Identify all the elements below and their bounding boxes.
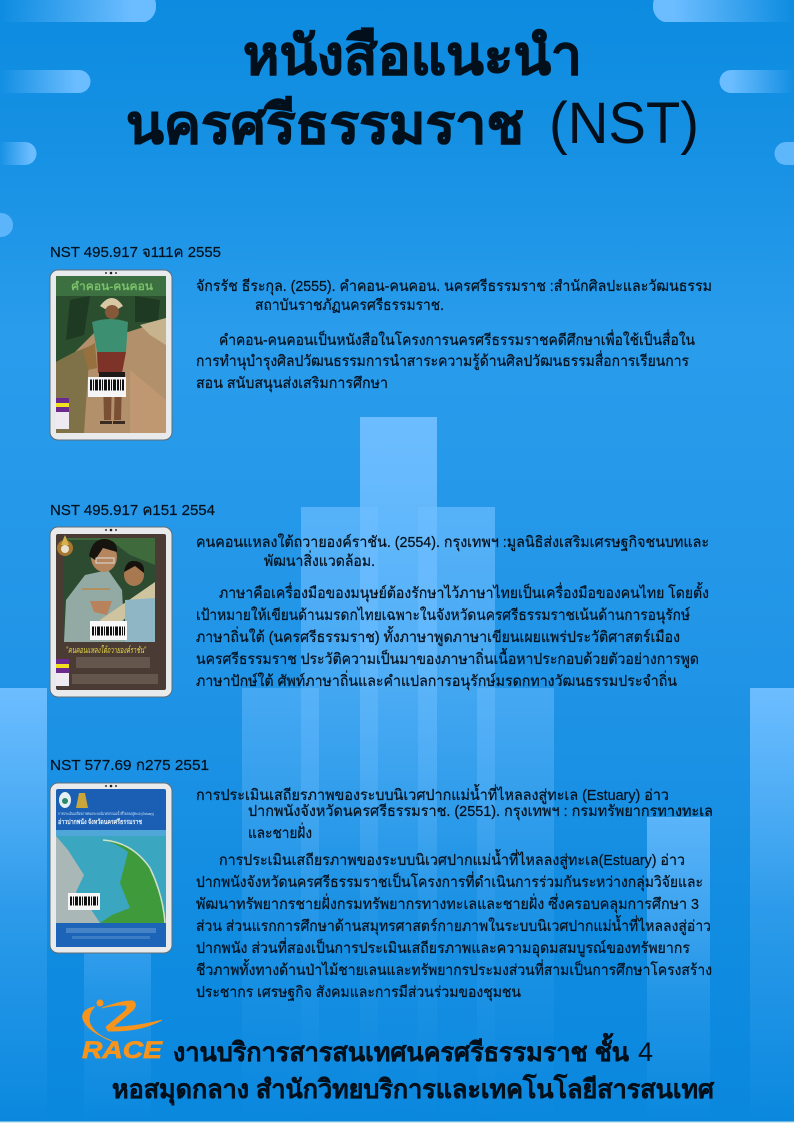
citation 2	[196, 533, 709, 570]
title: (NST)	[549, 91, 699, 156]
book cover 2 tablet: "คนคอนแหลงใต้ถวายองค์ราชัน"	[66, 644, 147, 655]
call number 1: NST 495.917 จ111ค 2555	[50, 244, 221, 261]
book cover 3 tablet: อ่าวปากพนัง จังหวัดนครศรีธรรมราช	[58, 818, 142, 826]
summary 3: พัฒนาทรัพยากรชายฝั่งกรมทรัพยากรทางทะเลและชายฝั่ง ซึ่งครอบคลุมการศึกษา 3	[196, 893, 699, 914]
summary 3: ปากพนัง ส่วนที่สองเป็นการประเมินเสถียรภาพและความอุดมสมบูรณ์ของทรัพยากร	[196, 937, 690, 958]
footer line 1: 4	[638, 1037, 653, 1067]
citation 2: คนคอนแหลงใต้ถวายองค์ราชัน. (2554). กรุงเทพฯ :มูลนิธิส่งเสริมเศรษฐกิจชนบทและ	[196, 533, 709, 552]
summary 3: ชีวภาพทั้งทางด้านป่าไม้ชายเลนและทรัพยากรประมงส่วนที่สามเป็นการศึกษาโครงสร้าง	[196, 959, 712, 979]
footer line 2: หอสมุดกลาง สำนักวิทยบริการและเทคโนโลยีสารสนเทศ	[112, 1073, 714, 1106]
summary 3: ปากพนังจังหวัดนครศรีธรรมราชเป็นโครงการที่ดำเนินการร่วมกันระหว่างกลุ่มวิจัยและ	[196, 871, 703, 892]
summary 1: คำคอน-คนคอนเป็นหนังสือในโครงการนครศรีธรรมราชคดีศึกษาเพื่อใช้เป็นสื่อใน	[219, 329, 695, 349]
summary 1: การทำนุบำรุงศิลปวัฒนธรรมการนำสาระความรู้ด้านศิลปวัฒนธรรมสื่อการเรียนการ	[196, 350, 689, 371]
book cover 3 tablet: การประเมินเสถียรภาพของระบบนิเวศปากแม่น้ำที่ไหลลงสู่ทะเล (Estuary)	[58, 809, 155, 817]
citation 3: ปากพนังจังหวัดนครศรีธรรมราช. (2551). กรุงเทพฯ : กรมทรัพยากรทางทะเล	[248, 803, 713, 821]
summary 1: สอน สนับสนุนส่งเสริมการศึกษา	[196, 375, 388, 393]
citation 3	[196, 784, 713, 842]
summary 2: นครศรีธรรมราช ประวัติความเป็นมาของภาษาถิ่นเนื้อหาประกอบด้วยตัวอย่างการพูด	[196, 648, 699, 668]
summary 2: ภาษาปักษ์ใต้ ศัพท์ภาษาถิ่นและคำแปลการอนุรักษ์มรดกทางวัฒนธรรมประจำถิ่น	[196, 670, 677, 691]
book cover 2 tablet	[50, 527, 172, 697]
book cover 1 tablet: คำคอน-คนคอน	[71, 280, 154, 293]
call number 2: NST 495.917 ค151 2554	[50, 502, 215, 519]
book cover 3 tablet	[50, 783, 172, 953]
bottom edge line	[0, 1122, 794, 1123]
call number 3: NST 577.69 ก275 2551	[50, 757, 209, 774]
citation 1	[196, 278, 712, 314]
RACE logo	[82, 1000, 163, 1064]
summary 3: ส่วน ส่วนแรกการศึกษาด้านสมุทรศาสตร์กายภาพในระบบนิเวศปากแม่น้ำที่ไหลลงสู่อ่าว	[196, 915, 711, 936]
summary 3	[196, 849, 712, 1002]
title	[126, 26, 699, 156]
decorative pills right	[653, 0, 794, 165]
footer line 1: งานบริการสารสนเทศนครศรีธรรมราช ชั้น	[173, 1032, 629, 1067]
citation 1: จักรรัช ธีระกุล. (2555). คำคอน-คนคอน. นครศรีธรรมราช :สำนักศิลปะและวัฒนธรรม	[196, 278, 712, 296]
citation 3: การประเมินเสถียรภาพของระบบนิเวศปากแม่น้ำที่ไหลลงสู่ทะเล (Estuary) อ่าว	[196, 784, 669, 804]
citation 1: สถาบันราชภัฏนครศรีธรรมราช.	[255, 297, 444, 314]
summary 2: เป้าหมายให้เขียนด้านมรดกไทยเฉพาะในจังหวัดนครศรีธรรมราชเน้นด้านการอนุรักษ์	[196, 606, 690, 625]
summary 3: การประเมินเสถียรภาพของระบบนิเวศปากแม่น้ำที่ไหลลงสู่ทะเล(Estuary) อ่าว	[219, 849, 685, 869]
title: หนังสือแนะนำ	[243, 26, 582, 86]
citation 3: และชายฝั่ง	[248, 822, 312, 842]
background columns	[0, 417, 794, 1123]
summary 2: ภาษาถิ่นใต้ (นครศรีธรรมราช) ทั้งภาษาพูดภาษาเขียนเผยแพร่ประวัติศาสตร์เมือง	[196, 626, 680, 646]
summary 3: ประชากร เศรษฐกิจ สังคมและการมีส่วนร่วมของชุมชน	[196, 984, 521, 1002]
RACE logo: RACE	[82, 1037, 163, 1064]
decorative pills left	[0, 0, 156, 237]
book cover 1 tablet	[50, 270, 172, 440]
summary 2: ภาษาคือเครื่องมือของมนุษย์ต้องรักษาไว้ภาษาไทยเป็นเครื่องมือของคนไทย โดยตั้ง	[219, 582, 709, 603]
summary 2	[196, 582, 709, 691]
citation 2: พัฒนาสิ่งแวดล้อม.	[264, 550, 375, 570]
title: นครศรีธรรมราช	[126, 95, 524, 155]
summary 1	[196, 329, 695, 393]
